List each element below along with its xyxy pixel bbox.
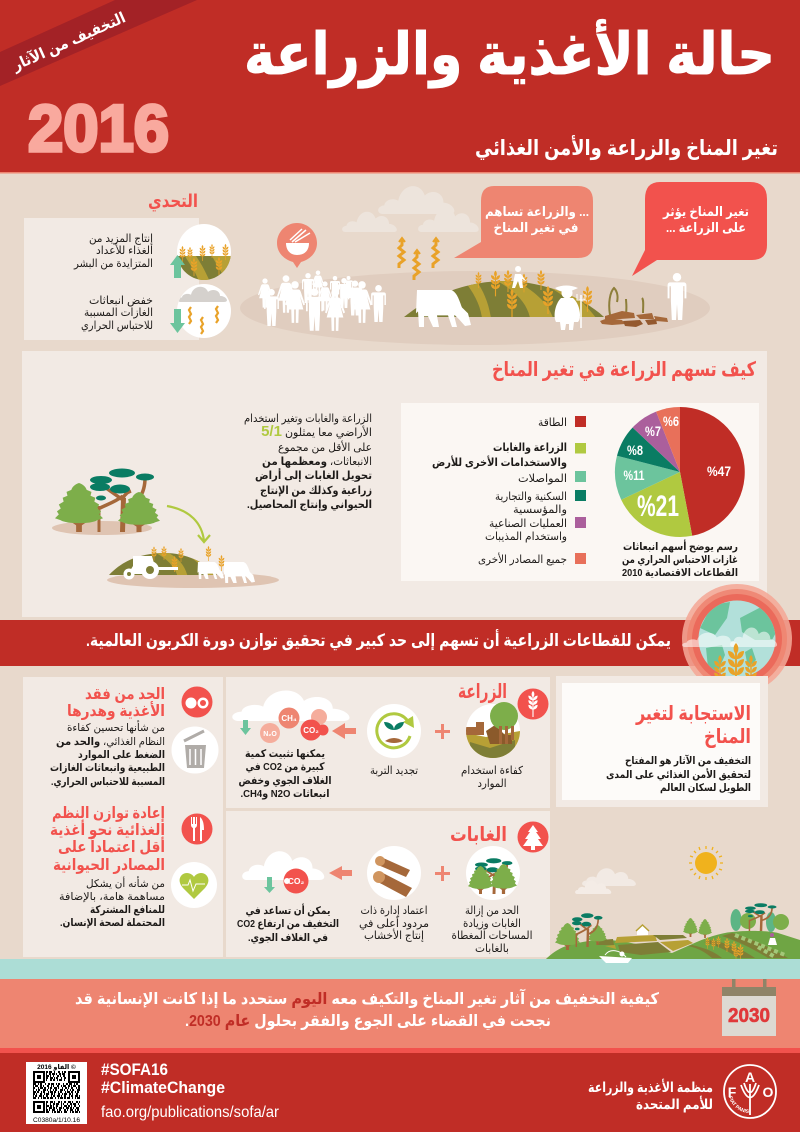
speech bubble: agriculture contributes: ... والزراعة تساهم <box>485 204 589 219</box>
icon: fork and knife <box>182 814 212 844</box>
icon: calendar 2030 <box>722 979 776 1036</box>
wilted plants and dry earth <box>600 288 668 327</box>
QR code: C0380a/1/10.16 <box>33 1117 80 1124</box>
food systems heading: إعادة توازن النظم <box>52 805 165 822</box>
food systems heading: الغذائية نحو أغذية <box>50 820 165 839</box>
legend: والاستخدامات الأخرى للأرض <box>432 455 567 469</box>
chart caption <box>622 539 738 579</box>
labels: agriculture: الموارد <box>478 778 506 790</box>
food loss heading <box>67 686 165 720</box>
pie chart: %7 <box>645 423 661 439</box>
crowd of people <box>258 270 386 331</box>
labels: forests: إنتاج الأخشاب <box>364 928 424 942</box>
text: forestry share: الانبعاثات، ومعظمها من <box>262 456 372 468</box>
legend: الزراعة والغابات <box>493 442 567 454</box>
panel: climate response <box>556 676 768 807</box>
plus sign <box>435 724 450 739</box>
speech bubble: agriculture contributes: في تغير المناخ <box>494 220 578 235</box>
scene: climate and agriculture <box>240 182 767 345</box>
icon: agriculture <box>518 688 548 720</box>
labels: agriculture: يمكنها تثبيت كمية <box>245 748 325 760</box>
clouds <box>342 186 479 232</box>
panel: forests <box>226 811 550 957</box>
labels: forests: الحد من إزالة <box>465 905 519 917</box>
FAO logo: F <box>728 1084 737 1100</box>
text: response: لتحقيق الأمن الغذائي على المدى <box>606 768 751 781</box>
FAO logo: O <box>763 1084 774 1100</box>
legend: المواصلات <box>518 473 567 485</box>
icon: more food field <box>177 224 231 280</box>
corner ribbon: mitigation <box>0 0 197 86</box>
legend: والمؤسسية <box>513 504 567 516</box>
hashtags and link <box>101 1061 280 1121</box>
text: response: التخفيف من الآثار هو المفتاح <box>625 754 751 767</box>
pie chart: %6 <box>663 413 679 429</box>
illustration: forest <box>52 468 160 535</box>
speech bubble: climate affects agriculture <box>632 182 767 276</box>
food systems text: للمنافع المشتركة <box>90 904 165 916</box>
legend: السكنية والتجارية <box>495 491 567 503</box>
pie chart: %8 <box>627 442 643 458</box>
food loss text <box>50 720 165 788</box>
text: forestry share: الأراضي معا يمثلون 5/1 <box>261 423 372 440</box>
food systems text: من شأنه أن يشكل <box>86 876 165 890</box>
challenge text: more food: الغذاء للأعداد <box>96 243 153 257</box>
chart caption: رسم يوضح أسهم انبعاثات <box>623 539 738 553</box>
icon: heart <box>171 862 217 908</box>
challenge heading: التحدي <box>148 191 198 212</box>
pie chart: %47 <box>707 463 731 479</box>
FAO name: منظمة الأغذية والزراعة <box>588 1079 713 1096</box>
food loss text: الضغط على الموارد <box>78 749 165 761</box>
ground ellipse <box>240 271 710 345</box>
text: response: الطويل لسكان العالم <box>660 782 751 794</box>
labels: agriculture: كفاءة استخدام <box>461 765 524 777</box>
text: forestry share <box>244 413 372 512</box>
heading: response <box>635 703 751 748</box>
hill with crops <box>404 266 604 318</box>
labels: agriculture: الغلاف الجوي وخفض <box>238 775 332 787</box>
icon: reforestation <box>466 846 520 900</box>
legend <box>432 416 586 566</box>
labels: forests: في الغلاف الجوي. <box>248 932 328 944</box>
food loss heading: الأغذية وهدرها <box>67 701 165 720</box>
speech bubble: agriculture contributes <box>454 186 593 258</box>
food loss text: المسببة للاحتباس الحراري. <box>51 776 165 788</box>
icon: timber logs <box>367 846 421 900</box>
illustration: landscape <box>545 903 800 960</box>
header band <box>0 0 800 174</box>
food loss text: النظام الغذائي، والحد من <box>56 736 165 748</box>
FAO logo: FIAT PANIS <box>728 1096 749 1113</box>
heading: response: الاستجابة لتغير <box>635 703 751 725</box>
labels: forests: المساحات المغطاة <box>452 930 532 942</box>
challenge text: more food <box>73 233 153 270</box>
message text line two: نجحت في القضاء على الجوع والفقر بحلول عام 2030. <box>185 1013 551 1031</box>
text: forestry share: الزراعة والغابات وتغير استخدام <box>244 413 372 425</box>
FAO name: للأمم المتحدة <box>636 1096 713 1112</box>
arrow: forest to farmland <box>167 506 210 542</box>
clouds: landscape <box>575 868 636 894</box>
band: 2030 message <box>0 979 800 1048</box>
pie chart: %21 <box>637 490 679 523</box>
legend: واستخدام المذيبات <box>485 531 567 543</box>
clouds with gases: N₂O <box>263 731 277 738</box>
illustration: farmland with tractor and cows <box>107 546 279 588</box>
text: forestry share: الحيواني وإنتاج المحاصيل. <box>247 499 372 512</box>
food systems heading <box>50 805 165 874</box>
challenge text: reduce emissions: الغازات المسببة <box>84 307 153 319</box>
corner ribbon: mitigation: التخفيف من الآثار <box>9 8 128 75</box>
panel: food loss and food systems <box>23 677 223 957</box>
speech bubble: climate affects agriculture: على الزراعة ... <box>666 220 746 235</box>
text: forestry share: تحويل الغابات إلى أراض <box>255 468 372 482</box>
arrow: left <box>329 866 352 880</box>
labels: forests: الغابات وزيادة <box>463 918 521 930</box>
arrow up <box>170 255 185 278</box>
icon: tomato <box>182 686 212 718</box>
clouds with gases: CO₂ <box>303 726 319 735</box>
illustration: sun <box>689 846 723 880</box>
chart caption: غازات الاحتباس الحراري من <box>622 554 738 566</box>
labels: forests: اعتماد إدارة ذات <box>360 905 428 917</box>
food loss text: الطبيعية وانبعاثات الغازات <box>50 762 165 774</box>
challenge text: more food: إنتاج المزيد من <box>89 233 153 245</box>
food systems text <box>59 876 165 929</box>
hashtags and link: fao.org/publications/sofa/ar <box>101 1104 280 1121</box>
panel: how agriculture contributes to climate change <box>22 351 767 617</box>
heading: forests: الغابات <box>450 824 507 846</box>
icon: boat <box>599 951 632 963</box>
text: forestry share: زراعية وكذلك من الإنتاج <box>260 485 372 498</box>
labels: agriculture <box>238 748 524 800</box>
food loss text: من شأنها تحسين كفاءة <box>67 720 165 734</box>
food systems heading: المصادر الحيوانية <box>53 857 165 874</box>
food systems heading: أقل اعتماداً على <box>58 836 165 856</box>
chart card <box>401 403 759 581</box>
labels: agriculture: كبيرة من CO2 في <box>246 761 325 773</box>
food systems text: مساهمة هامة، بالإضافة <box>59 891 165 903</box>
hashtags and link: #SOFA16 <box>101 1061 168 1079</box>
challenge text: reduce emissions <box>81 295 153 332</box>
challenge text: more food: المتزايدة من البشر <box>73 258 153 270</box>
icon: forests <box>518 822 548 852</box>
FAO logo <box>723 1064 777 1119</box>
heading: agriculture: الزراعة <box>458 681 507 703</box>
FAO logo: A <box>745 1069 755 1085</box>
icon: calendar 2030: 2030 <box>728 1005 770 1027</box>
cloud with CO2 <box>242 851 324 894</box>
labels: agriculture: تجديد التربة <box>370 765 418 777</box>
text: response <box>606 754 751 794</box>
heading: response: المناخ <box>704 726 751 748</box>
challenge text: reduce emissions: للاحتباس الحراري <box>81 320 153 332</box>
band: carbon balance <box>0 620 800 666</box>
footer <box>0 1048 800 1132</box>
cloud with CO2: CO₂ <box>288 876 304 886</box>
icon: land efficiency <box>466 702 520 760</box>
band: carbon balance: يمكن للقطاعات الزراعية أن تسهم إلى حد كبير في تحقيق توازن دورة الكربون العالمية. <box>86 629 671 651</box>
pie chart <box>615 407 745 537</box>
challenge box <box>24 218 199 340</box>
panel: the challenge <box>24 191 234 340</box>
icon: trash bin <box>172 726 218 774</box>
labels: forests: بالغابات <box>475 943 509 955</box>
year 2016: 2016 <box>28 91 169 165</box>
man standing <box>668 273 686 320</box>
FAO name <box>588 1079 713 1112</box>
labels: forests: يمكن أن تساعد في <box>246 903 331 917</box>
clouds with gases: CH₄ <box>281 714 297 723</box>
labels: forests <box>237 903 532 955</box>
QR code <box>26 1062 87 1124</box>
food systems text: المحتملة لصحة الإنسان. <box>60 917 165 929</box>
clouds with gases <box>232 691 350 743</box>
labels: forests: التخفيف من ارتفاع CO2 <box>237 918 339 930</box>
icon: soil restoration <box>367 704 421 758</box>
labels: agriculture: انبعاثات N2O وCH4. <box>240 788 330 800</box>
plus sign <box>435 866 450 881</box>
panel: agriculture <box>226 677 550 808</box>
farmer <box>555 286 585 330</box>
pie chart: %11 <box>624 467 645 483</box>
icon: reduced emissions <box>177 284 231 338</box>
hashtags and link: #ClimateChange <box>101 1079 225 1097</box>
labels: forests: مردود أعلى في <box>359 916 429 930</box>
legend: جميع المصادر الأخرى <box>478 552 567 566</box>
challenge text: reduce emissions: خفض انبعاثات <box>89 295 153 307</box>
cow <box>416 290 471 327</box>
speech bubble: climate affects agriculture: تغير المناخ يؤثر <box>662 204 749 219</box>
text: forestry share: على الأقل من مجموع <box>278 440 372 454</box>
greenhouse gas arrows <box>399 238 439 280</box>
teal water band <box>0 959 800 979</box>
icon: food bowl pin <box>277 223 317 268</box>
arrow: left <box>332 723 356 739</box>
food loss heading: الحد من فقد <box>85 686 165 703</box>
icon: globe with wheat <box>682 584 792 694</box>
chart caption: القطاعات الاقتصادية 2010 <box>622 567 738 579</box>
legend: الطاقة <box>538 417 567 429</box>
message text: كيفية التخفيف من آثار تغير المناخ والتكيف معه اليوم ستحدد ما إذا كانت الإنسانية قد <box>75 988 660 1008</box>
QR code: © الفاو 2016 <box>37 1063 76 1071</box>
arrow down <box>170 309 185 333</box>
legend: العمليات الصناعية <box>489 518 567 530</box>
